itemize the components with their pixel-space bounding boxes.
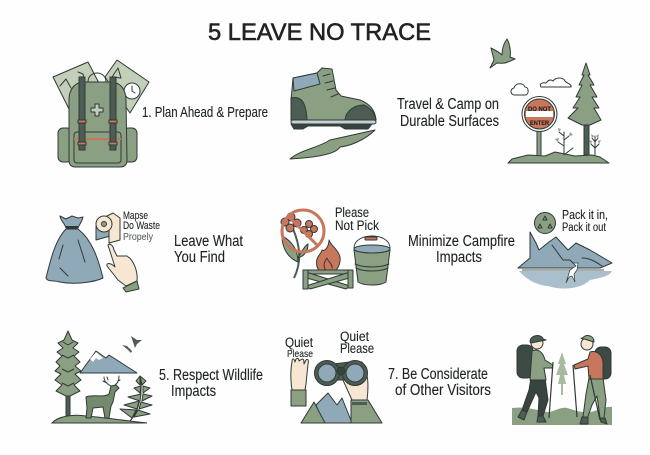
- label: mapse do waste: Propely: [123, 231, 154, 243]
- label: travel and camp: Durable Surfaces: [400, 113, 499, 130]
- icon: raised hand: [291, 358, 308, 406]
- label: quiet please left: Please: [287, 348, 313, 360]
- icon: backpack with maps: [53, 60, 149, 167]
- icon: trail: [290, 130, 375, 159]
- icon: left hiker: [517, 336, 553, 422]
- icon: water bucket: [354, 236, 390, 285]
- icon: clouds: [511, 78, 571, 95]
- label: please not pick: Not Pick: [335, 218, 379, 233]
- icon: right hiker: [573, 336, 611, 424]
- label: respect wildlife: 5. Respect Wildlife: [159, 367, 263, 384]
- icon: crossed-out flower: [281, 210, 324, 278]
- icon: birds: [122, 336, 142, 353]
- icon: mountains, lake and deer: [518, 232, 612, 288]
- label: minimize campfire impacts: Minimize Campfire: [408, 233, 515, 250]
- icon: do not enter sign: DO NOT: [528, 106, 551, 113]
- label: quiet please right: Please: [340, 341, 374, 356]
- icon: do not enter sign: ENTER: [530, 120, 549, 127]
- icon: background tree: [556, 352, 568, 395]
- label: quiet please left: Quiet: [285, 335, 313, 350]
- icon: do not enter sign: [522, 96, 557, 158]
- panel: plan ahead: [53, 60, 268, 167]
- label: minimize campfire impacts: [408, 233, 515, 266]
- title: 5 LEAVE NO TRACE: [208, 19, 431, 46]
- label: minimize campfire impacts: Impacts: [436, 249, 482, 266]
- icon: fern: [120, 376, 152, 421]
- icon: bird: [490, 39, 515, 68]
- icon: hiking boot: [290, 68, 376, 159]
- label: leave what you find: You Find: [174, 249, 225, 266]
- panel: quiet please: [285, 329, 491, 423]
- label: leave what you find: Leave What: [174, 233, 244, 250]
- label: plan ahead: 1. Plan Ahead & Prepare: [142, 105, 268, 121]
- label: quiet please right: Quiet: [340, 329, 369, 344]
- icon: trash bag: [46, 216, 103, 283]
- label: travel and camp: Travel & Camp on: [397, 96, 499, 113]
- label: please not pick: Please: [335, 205, 369, 220]
- icon: mountain backdrop: [80, 351, 137, 373]
- panel: respect wildlife: [52, 331, 263, 423]
- label: please not pick: [335, 205, 379, 233]
- icon: tree: [55, 331, 81, 417]
- label: quiet please left: [285, 335, 313, 360]
- panel: hikers: [512, 336, 612, 425]
- panel: leave what you find: [46, 210, 244, 292]
- label: pack it in: Pack it in,: [562, 208, 608, 222]
- icon: campfire: [303, 240, 353, 289]
- icon: ground: [512, 407, 612, 425]
- icon: recycle badge: [534, 212, 556, 234]
- icon: binoculars and hand: [314, 360, 382, 423]
- label: respect wildlife: [159, 367, 263, 400]
- label: travel and camp: [397, 96, 499, 130]
- label: be considerate: of Other Visitors: [395, 382, 491, 399]
- label: pack it in: Pack it out: [562, 222, 607, 234]
- label: be considerate: [388, 366, 491, 399]
- icon: pine tree and ground: [508, 63, 609, 163]
- label: be considerate: 7. Be Considerate: [388, 366, 488, 383]
- label: mapse do waste: Mapse: [123, 210, 148, 222]
- label: quiet please right: [340, 329, 374, 356]
- label: mapse do waste: Do Waste: [123, 220, 160, 232]
- label: respect wildlife: Impacts: [171, 383, 216, 400]
- icon: mountains: [301, 393, 352, 423]
- label: pack it in: [562, 208, 608, 234]
- icon: ground: [52, 415, 147, 423]
- icon: deer: [86, 376, 120, 418]
- label: leave what you find: [174, 233, 244, 266]
- panel: travel and camp: [290, 39, 609, 163]
- icon: toilet roll and pointing hand: [96, 213, 139, 292]
- label: mapse do waste: [123, 210, 160, 243]
- panel: please not pick and campfire: [281, 205, 612, 289]
